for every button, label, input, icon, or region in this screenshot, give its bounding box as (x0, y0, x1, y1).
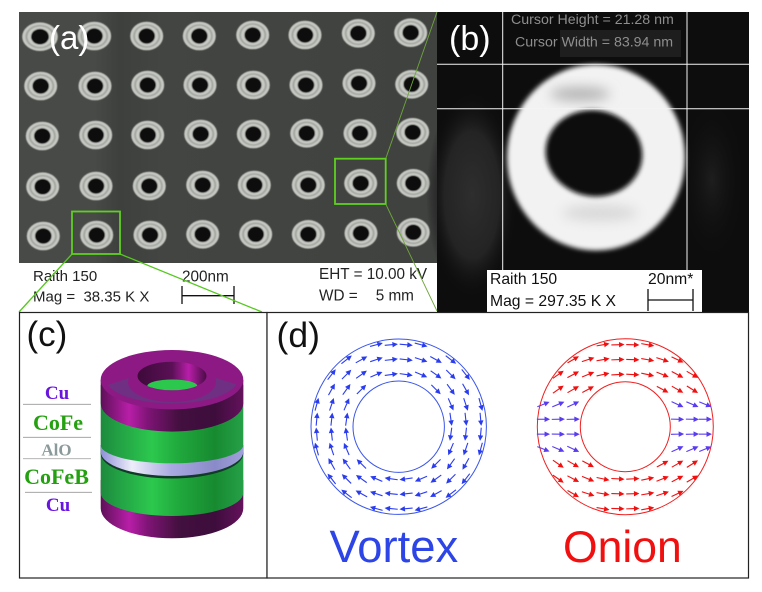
caption bar (a): 5 mm (376, 288, 414, 305)
Vortex label: Vortex (330, 521, 458, 572)
caption bar (b): Raith 150 (490, 271, 557, 288)
caption bar (b) (487, 270, 702, 312)
onion ring diagram (536, 339, 713, 515)
label (c): (c) (26, 315, 67, 354)
layer names: AlO (41, 441, 72, 460)
Onion label: Onion (563, 523, 682, 572)
3D cylinder (101, 350, 243, 538)
layer names: Cu (45, 383, 70, 404)
label (d): (d) (276, 315, 320, 355)
bright ring (507, 64, 685, 250)
ring array (22, 18, 430, 250)
cursor readout: Cursor Width = 83.94 nm (515, 35, 673, 51)
layer names (23, 383, 92, 516)
panel (d): magnetic states (267, 312, 748, 578)
cursor lines (437, 12, 749, 270)
zoom connector lines and selection boxes (19, 12, 437, 312)
label (b): (b) (449, 20, 491, 58)
caption bar (a): WD = (319, 288, 358, 305)
panel (b): zoomed SEM ring (426, 12, 749, 312)
caption bar (a): Raith 150 (33, 268, 97, 285)
layer names: Cu (46, 495, 71, 516)
caption bar (a) (19, 263, 437, 312)
panel (c): layered ring stack (20, 312, 267, 578)
cursor readout: Cursor Height = 21.28 nm (511, 12, 674, 28)
caption bar (a): EHT = 10.00 kV (319, 266, 428, 283)
caption bar (b): Mag = 297.35 K X (490, 293, 617, 310)
panel (a): SEM image of ring array (19, 12, 437, 312)
label (a): (a) (49, 19, 89, 56)
caption bar (a): 200nm (182, 269, 229, 286)
cursor readout (511, 12, 674, 51)
caption bar (b): 20nm* (648, 271, 693, 288)
layer names: CoFe (33, 410, 83, 435)
caption bar (a): Mag = 38.35 K X (33, 289, 149, 306)
layer names: CoFeB (24, 464, 89, 489)
vortex ring diagram (311, 339, 486, 514)
